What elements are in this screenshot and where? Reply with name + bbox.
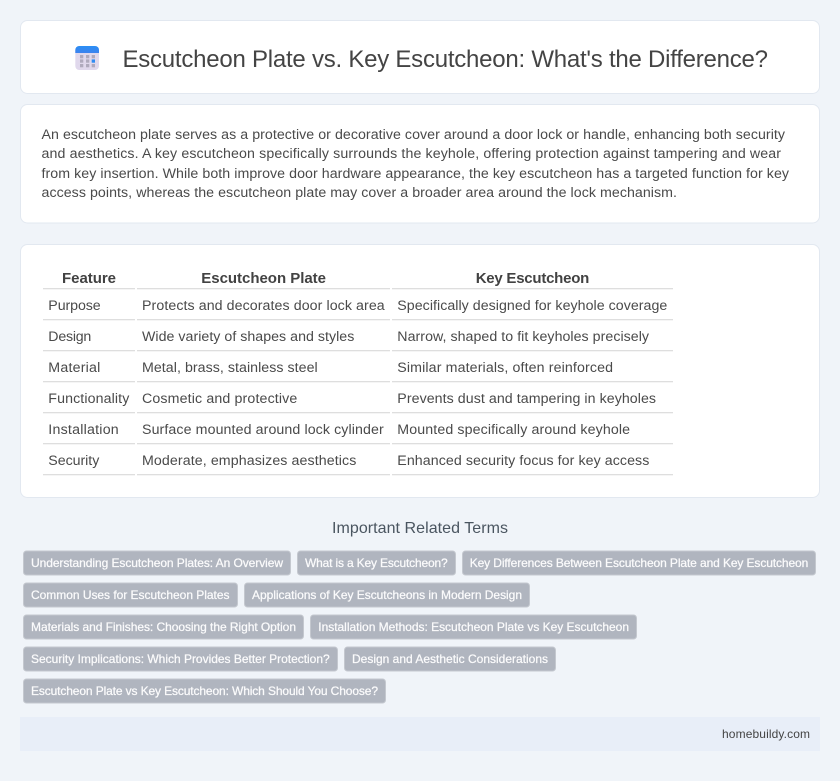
table header row: Escutcheon Plate [201, 270, 326, 287]
table row: functionality [43, 391, 673, 413]
tag: key differences: Key Differences Between Escutcheon Plate and Key Escutcheon [470, 556, 808, 570]
table row: functionality: Cosmetic and protective [142, 391, 297, 407]
table header row: Feature [62, 270, 116, 287]
tag: what is a key escutcheon: What is a Key Escutcheon? [305, 556, 448, 570]
table row: design: Wide variety of shapes and styles [142, 329, 354, 345]
table row: design: Narrow, shaped to fit keyholes precisely [397, 329, 650, 345]
tag list: related terms [24, 551, 816, 703]
tag: common uses: Common Uses for Escutcheon Plates [31, 588, 230, 602]
tag: applications: Applications of Key Escutcheons in Modern Design [252, 588, 522, 602]
table row: purpose: Purpose [48, 298, 101, 314]
tag: materials and finishes [24, 615, 304, 639]
text block: introduction paragraph [42, 127, 790, 201]
tag: security implications [24, 647, 338, 671]
table row: installation [43, 422, 673, 444]
text block: introduction paragraph: An escutcheon plate serves as a protective or decorative cover around a door lock or handle, enhancing both security [42, 127, 786, 143]
table row: security: Security [48, 453, 100, 469]
tag: installation methods: Installation Methods: Escutcheon Plate vs Key Escutcheon [318, 620, 629, 634]
tag: materials and finishes: Materials and Finishes: Choosing the Right Option [31, 620, 296, 634]
table row: purpose [43, 298, 673, 320]
tag: understanding escutcheon plates: Understanding Escutcheon Plates: An Overview [31, 556, 283, 570]
table row: security: Enhanced security focus for key access [397, 453, 649, 469]
panel: introduction [20, 104, 820, 223]
table row: security [43, 453, 673, 475]
table row: functionality: Functionality [48, 391, 130, 407]
heading: important related terms: Important Related Terms [332, 520, 508, 537]
table row: purpose: Specifically designed for keyhole coverage [397, 298, 667, 314]
table row: material [43, 360, 673, 382]
panel: comparison table [20, 244, 820, 498]
table row: material: Material [48, 360, 100, 376]
text block: introduction paragraph: and aesthetics. A key escutcheon specifically surrounds the keyhole, offering protection against tampering and wear [42, 146, 781, 162]
table header row [43, 270, 673, 289]
table row: security: Moderate, emphasizes aesthetics [142, 453, 356, 469]
text block: introduction paragraph: from key insertion. While both improve door hardware appearance, the key escutcheon has a targeted function for key [42, 166, 790, 182]
text block: introduction paragraph: access points, whereas the escutcheon plate may cover a broader area around the lock mechanism. [42, 185, 677, 201]
table header row: Key Escutcheon [476, 270, 589, 287]
table row: installation: Mounted specifically around keyhole [397, 422, 630, 438]
tag: what is a key escutcheon [298, 551, 456, 575]
footer source: homebuildy.com [722, 727, 810, 741]
tag: which should you choose [24, 679, 386, 703]
table row: material: Similar materials, often reinforced [397, 360, 613, 376]
table row: functionality: Prevents dust and tampering in keyholes [397, 391, 656, 407]
tag: design and aesthetic: Design and Aesthetic Considerations [352, 652, 548, 666]
table row: purpose: Protects and decorates door lock area [142, 298, 385, 314]
tag: common uses [24, 583, 238, 607]
tag: design and aesthetic [344, 647, 556, 671]
table row: material: Metal, brass, stainless steel [142, 360, 318, 376]
tag: applications [244, 583, 530, 607]
tag: installation methods [310, 615, 636, 639]
panel: header [20, 20, 820, 94]
tag: which should you choose: Escutcheon Plate vs Key Escutcheon: Which Should You Choose? [31, 684, 378, 698]
footer [20, 717, 820, 751]
tag: understanding escutcheon plates [24, 551, 290, 575]
tag: key differences [462, 551, 816, 575]
icon: calendar [75, 46, 99, 70]
table row: design: Design [48, 329, 91, 345]
title: Escutcheon Plate vs. Key Escutcheon: What's the Difference? [122, 46, 768, 73]
table row: installation: Installation [48, 422, 119, 438]
tag: security implications: Security Implications: Which Provides Better Protection? [31, 652, 330, 666]
table row: installation: Surface mounted around lock cylinder [142, 422, 384, 438]
table row: design [43, 329, 673, 351]
